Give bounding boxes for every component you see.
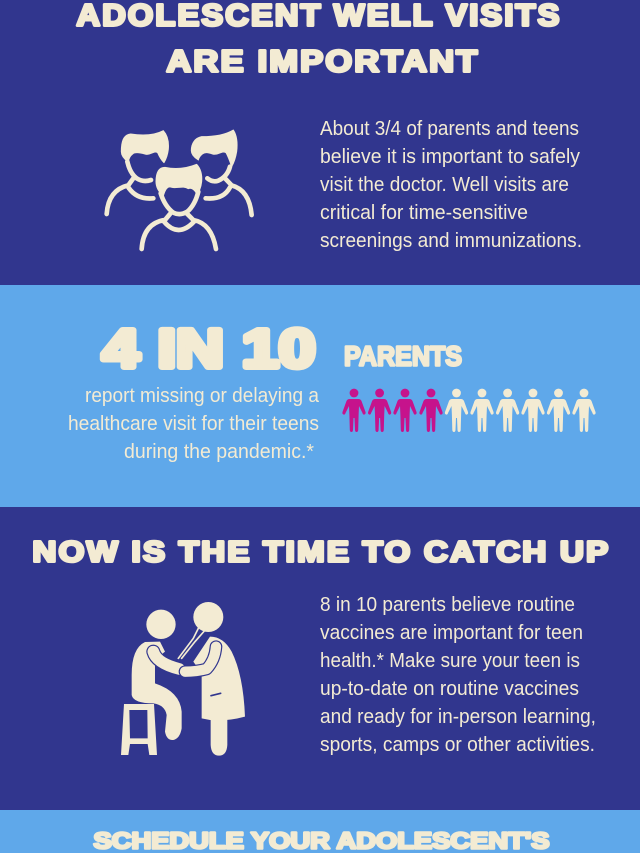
text block: vaccines: health.* Make sure your teen is (320, 649, 580, 672)
text block: intro: critical for time-sensitive (320, 201, 528, 224)
icon: group of three teens (107, 130, 252, 249)
title (76, 0, 562, 78)
text block: intro: About 3/4 of parents and teens (320, 117, 579, 140)
text block: missed visits (68, 384, 320, 463)
label: parents: PARENTS (344, 341, 462, 372)
heading: schedule: SCHEDULE YOUR ADOLESCENT'S (94, 828, 550, 853)
pictogram: 4 of 10 parents (342, 389, 596, 432)
panel: missed visits statistic (0, 285, 640, 507)
panel: intro (0, 0, 640, 285)
text block: intro: screenings and immunizations. (320, 229, 582, 252)
text block: vaccines: 8 in 10 parents believe routine (320, 593, 575, 616)
text block: vaccines: vaccines are important for teen (320, 621, 583, 644)
text block: intro: believe it is important to safely (320, 145, 581, 168)
text block: missed visits: report missing or delaying a (85, 384, 320, 407)
icon: doctor examining patient (121, 602, 245, 756)
text block: intro: visit the doctor. Well visits are (320, 173, 569, 196)
text block: vaccines: up-to-date on routine vaccines (320, 677, 579, 700)
text block: vaccines (320, 593, 596, 756)
text block: missed visits: healthcare visit for their teens (68, 412, 319, 435)
big number: 4 IN 10 (102, 319, 316, 379)
text block: missed visits: during the pandemic.* (124, 440, 314, 463)
text block: vaccines: and ready for in-person learning, (320, 705, 596, 728)
panel: schedule (0, 810, 640, 853)
title: ARE IMPORTANT (166, 44, 480, 78)
text block: vaccines: sports, camps or other activities. (320, 733, 595, 756)
heading: catch up: NOW IS THE TIME TO CATCH UP (32, 536, 610, 568)
panel: catch up (0, 507, 640, 810)
text block: intro (320, 117, 582, 252)
